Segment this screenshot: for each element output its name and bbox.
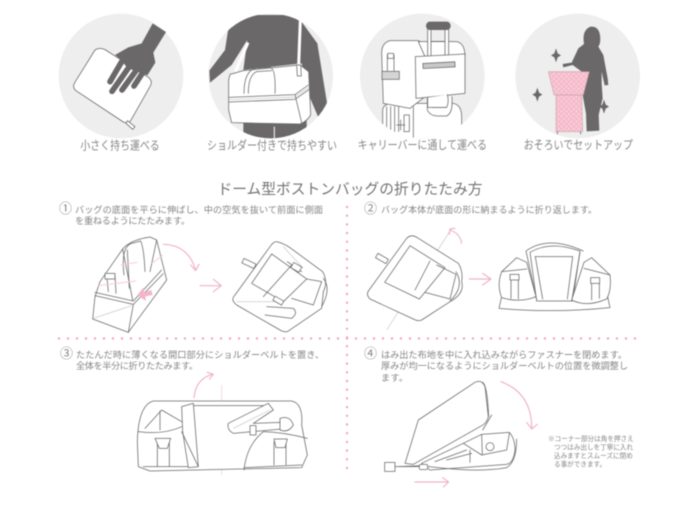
step 1 illustrations [93,237,327,332]
step 4 text: はみ出た布地を中に入れ込みながらファスナーを閉めます。 [381,349,627,360]
corner note: つつはみ出しを丁寧に入れ [554,442,634,452]
step 4 text: ④ [364,346,377,361]
arrow: fold over [194,372,213,398]
arrow: close down [501,382,537,429]
icon: side pocket [382,53,399,79]
step 4 text: ます。 [381,373,408,383]
icon: bag [229,65,311,124]
panel: step 4 [364,346,634,487]
icon: person silhouette [209,15,327,140]
arrow: curved [163,244,199,271]
icon: zipper pull [126,121,135,129]
corner note: ※コーナー部分は角を押さえ [548,434,634,443]
panel: carry small [59,14,183,153]
step 1 text: ① [59,201,72,216]
illustration: dome bag [93,237,167,332]
label: キャリーバーに通して運べる [358,139,487,152]
panel: shoulder strap [207,14,337,153]
fold line [221,385,223,475]
step 4 illustration [385,381,537,487]
corner note: 込みますとスムーズに閉め [554,451,633,460]
illustration: opened bag [499,243,610,311]
step 4 text: 厚みが均一になるようにショルダーベルトの位置を微調整し [381,360,628,371]
illustration: lower half contents [398,432,517,470]
icon: suitcase [383,97,462,140]
step 2 text: ② [364,201,377,216]
panel: step 3 [60,346,324,475]
title: ドーム型ボストンバッグの折りたたみ方 [218,181,482,198]
icon background circle [59,14,183,138]
step 1 text: バッグの底面を平らに伸ばし、中の空気を抜いて前面に側面 [75,204,323,215]
icon background circle [360,14,485,138]
illustration: folded flat bag [137,401,307,471]
icon background circle [515,14,640,138]
panel: step 1 [59,201,327,332]
panel: matching set [515,14,640,152]
icon: shoulder strap [235,20,300,72]
step 1 text: を重ねるようにたたみます。 [75,215,190,226]
label: ショルダー付きで持ちやすい [207,139,337,153]
arrow: fold up [449,228,462,243]
icon: trolley handle [426,22,451,56]
step 2 text: バッグ本体が底面の形に納まるように折り返します。 [381,204,597,215]
arrow: to next [200,279,221,292]
icon background circle [208,14,333,138]
icon: woman silhouette [563,27,608,131]
pink fold arrows [98,255,163,286]
step 2 illustrations [367,228,610,330]
icon: bag body [382,41,425,108]
corner note: る事ができます。 [554,460,606,468]
label: 小さく持ち運べる [80,139,160,153]
illustration: upper flap [405,381,488,464]
arrow: to next [469,273,491,285]
icon: front panel [415,54,465,107]
arrow: zipper direction [415,478,449,487]
panel: carrier bar [358,14,487,152]
label: おそろいでセットアップ [524,139,633,152]
panel: step 2 [364,201,610,330]
step 3 text: たたんだ時に薄くなる開口部分にショルダーベルトを置き、 [76,349,324,360]
icon: zipper tag [385,462,428,471]
step 3 text: 全体を半分に折りたたみます。 [76,360,198,371]
step 3 illustration [137,372,307,475]
step 3 text: ③ [60,346,73,361]
icon: sparkles [532,48,609,114]
icon: folded pouch [74,48,151,123]
dotted dividers [59,207,642,470]
illustration: folded bag with pocket [367,228,462,330]
illustration: folded bag [233,242,327,332]
icon: hand [110,23,166,91]
illustration: shoulder belt [228,403,293,435]
icon: pink set bags [548,72,589,134]
